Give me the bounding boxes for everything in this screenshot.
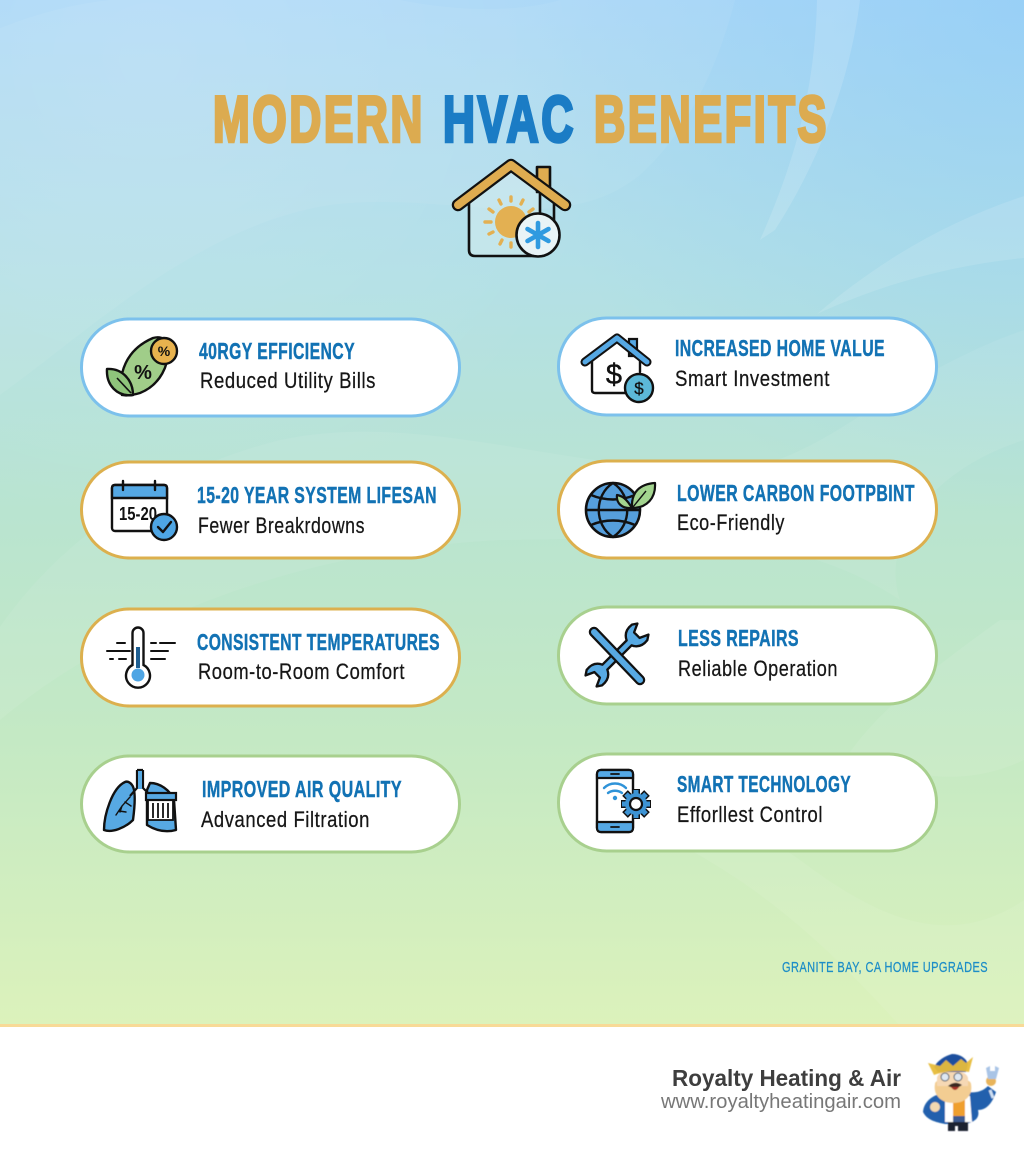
text: less repairs <box>678 625 838 681</box>
panel: consistent temperatures <box>82 609 460 706</box>
icon: house with dollar: $ <box>634 379 644 398</box>
text: less repairs: LESS REPAIRS <box>678 625 799 651</box>
footer band <box>0 1024 1024 1154</box>
panel: system lifespan <box>82 462 460 558</box>
icon: calendar: 15-20 <box>119 504 157 524</box>
text: consistent temperatures: Room-to-Room Comfort <box>198 659 405 684</box>
text: energy efficiency: 40RGY EFFICIENCY <box>199 338 355 364</box>
panel: carbon footprint <box>558 461 936 558</box>
text: less repairs: Reliable Operation <box>678 656 838 681</box>
brand name and website: Royalty Heating & Air <box>672 1065 901 1091</box>
icon: calendar <box>112 481 177 540</box>
panel: smart technology <box>558 754 936 851</box>
icon: house with dollar <box>585 338 653 402</box>
text: energy efficiency: Reduced Utility Bills <box>200 368 376 393</box>
text: carbon footprint: Eco-Friendly <box>677 510 785 535</box>
text: home value <box>675 335 885 391</box>
text: air quality <box>201 776 402 832</box>
title: HVAC <box>443 82 576 155</box>
text: consistent temperatures: CONSISTENT TEMPERATURES <box>197 629 440 655</box>
title: BENEFITS <box>594 82 829 155</box>
icon: leaf with percent: % <box>134 362 152 384</box>
panel: home value <box>558 318 936 415</box>
icon: phone with wifi and gear <box>597 770 651 832</box>
text: smart technology: Efforllest Control <box>677 802 823 827</box>
text: consistent temperatures <box>197 629 440 684</box>
title: MODERN <box>213 82 425 155</box>
text: air quality: Advanced Filtration <box>201 807 370 832</box>
text: carbon footprint: LOWER CARBON FOOTPBINT <box>677 480 915 506</box>
icon: house with sun and snowflake <box>458 165 565 256</box>
text: system lifespan: Fewer Breakrdowns <box>198 513 365 538</box>
text: system lifespan: 15-20 YEAR SYSTEM LIFESAN <box>197 482 437 508</box>
text: smart technology <box>677 771 851 827</box>
brand name and website <box>660 1065 901 1113</box>
icon: wrench and screwdriver <box>583 621 651 689</box>
icon: thermometer <box>107 628 175 688</box>
text: air quality: IMPROVED AIR QUALITY <box>202 776 402 802</box>
icon: lungs and filter <box>104 770 176 831</box>
text: system lifespan <box>197 482 437 538</box>
icon: leaf with percent: % <box>158 343 171 359</box>
icon: house with dollar: $ <box>606 359 622 391</box>
panel: air quality <box>82 756 460 852</box>
text: carbon footprint <box>677 480 915 535</box>
panel: energy efficiency <box>82 319 460 416</box>
text: energy efficiency <box>199 338 376 393</box>
mascot: king with wrench <box>923 1054 999 1131</box>
title <box>213 82 829 155</box>
panel: less repairs <box>558 607 936 704</box>
text: smart technology: SMART TECHNOLOGY <box>677 771 851 797</box>
brand name and website: www.royaltyheatingair.com <box>660 1091 901 1113</box>
text: home value: INCREASED HOME VALUE <box>675 335 885 361</box>
text: home value: Smart Investment <box>675 366 830 391</box>
icon: globe with leaves <box>586 483 655 537</box>
icon: leaf with percent <box>107 337 177 395</box>
